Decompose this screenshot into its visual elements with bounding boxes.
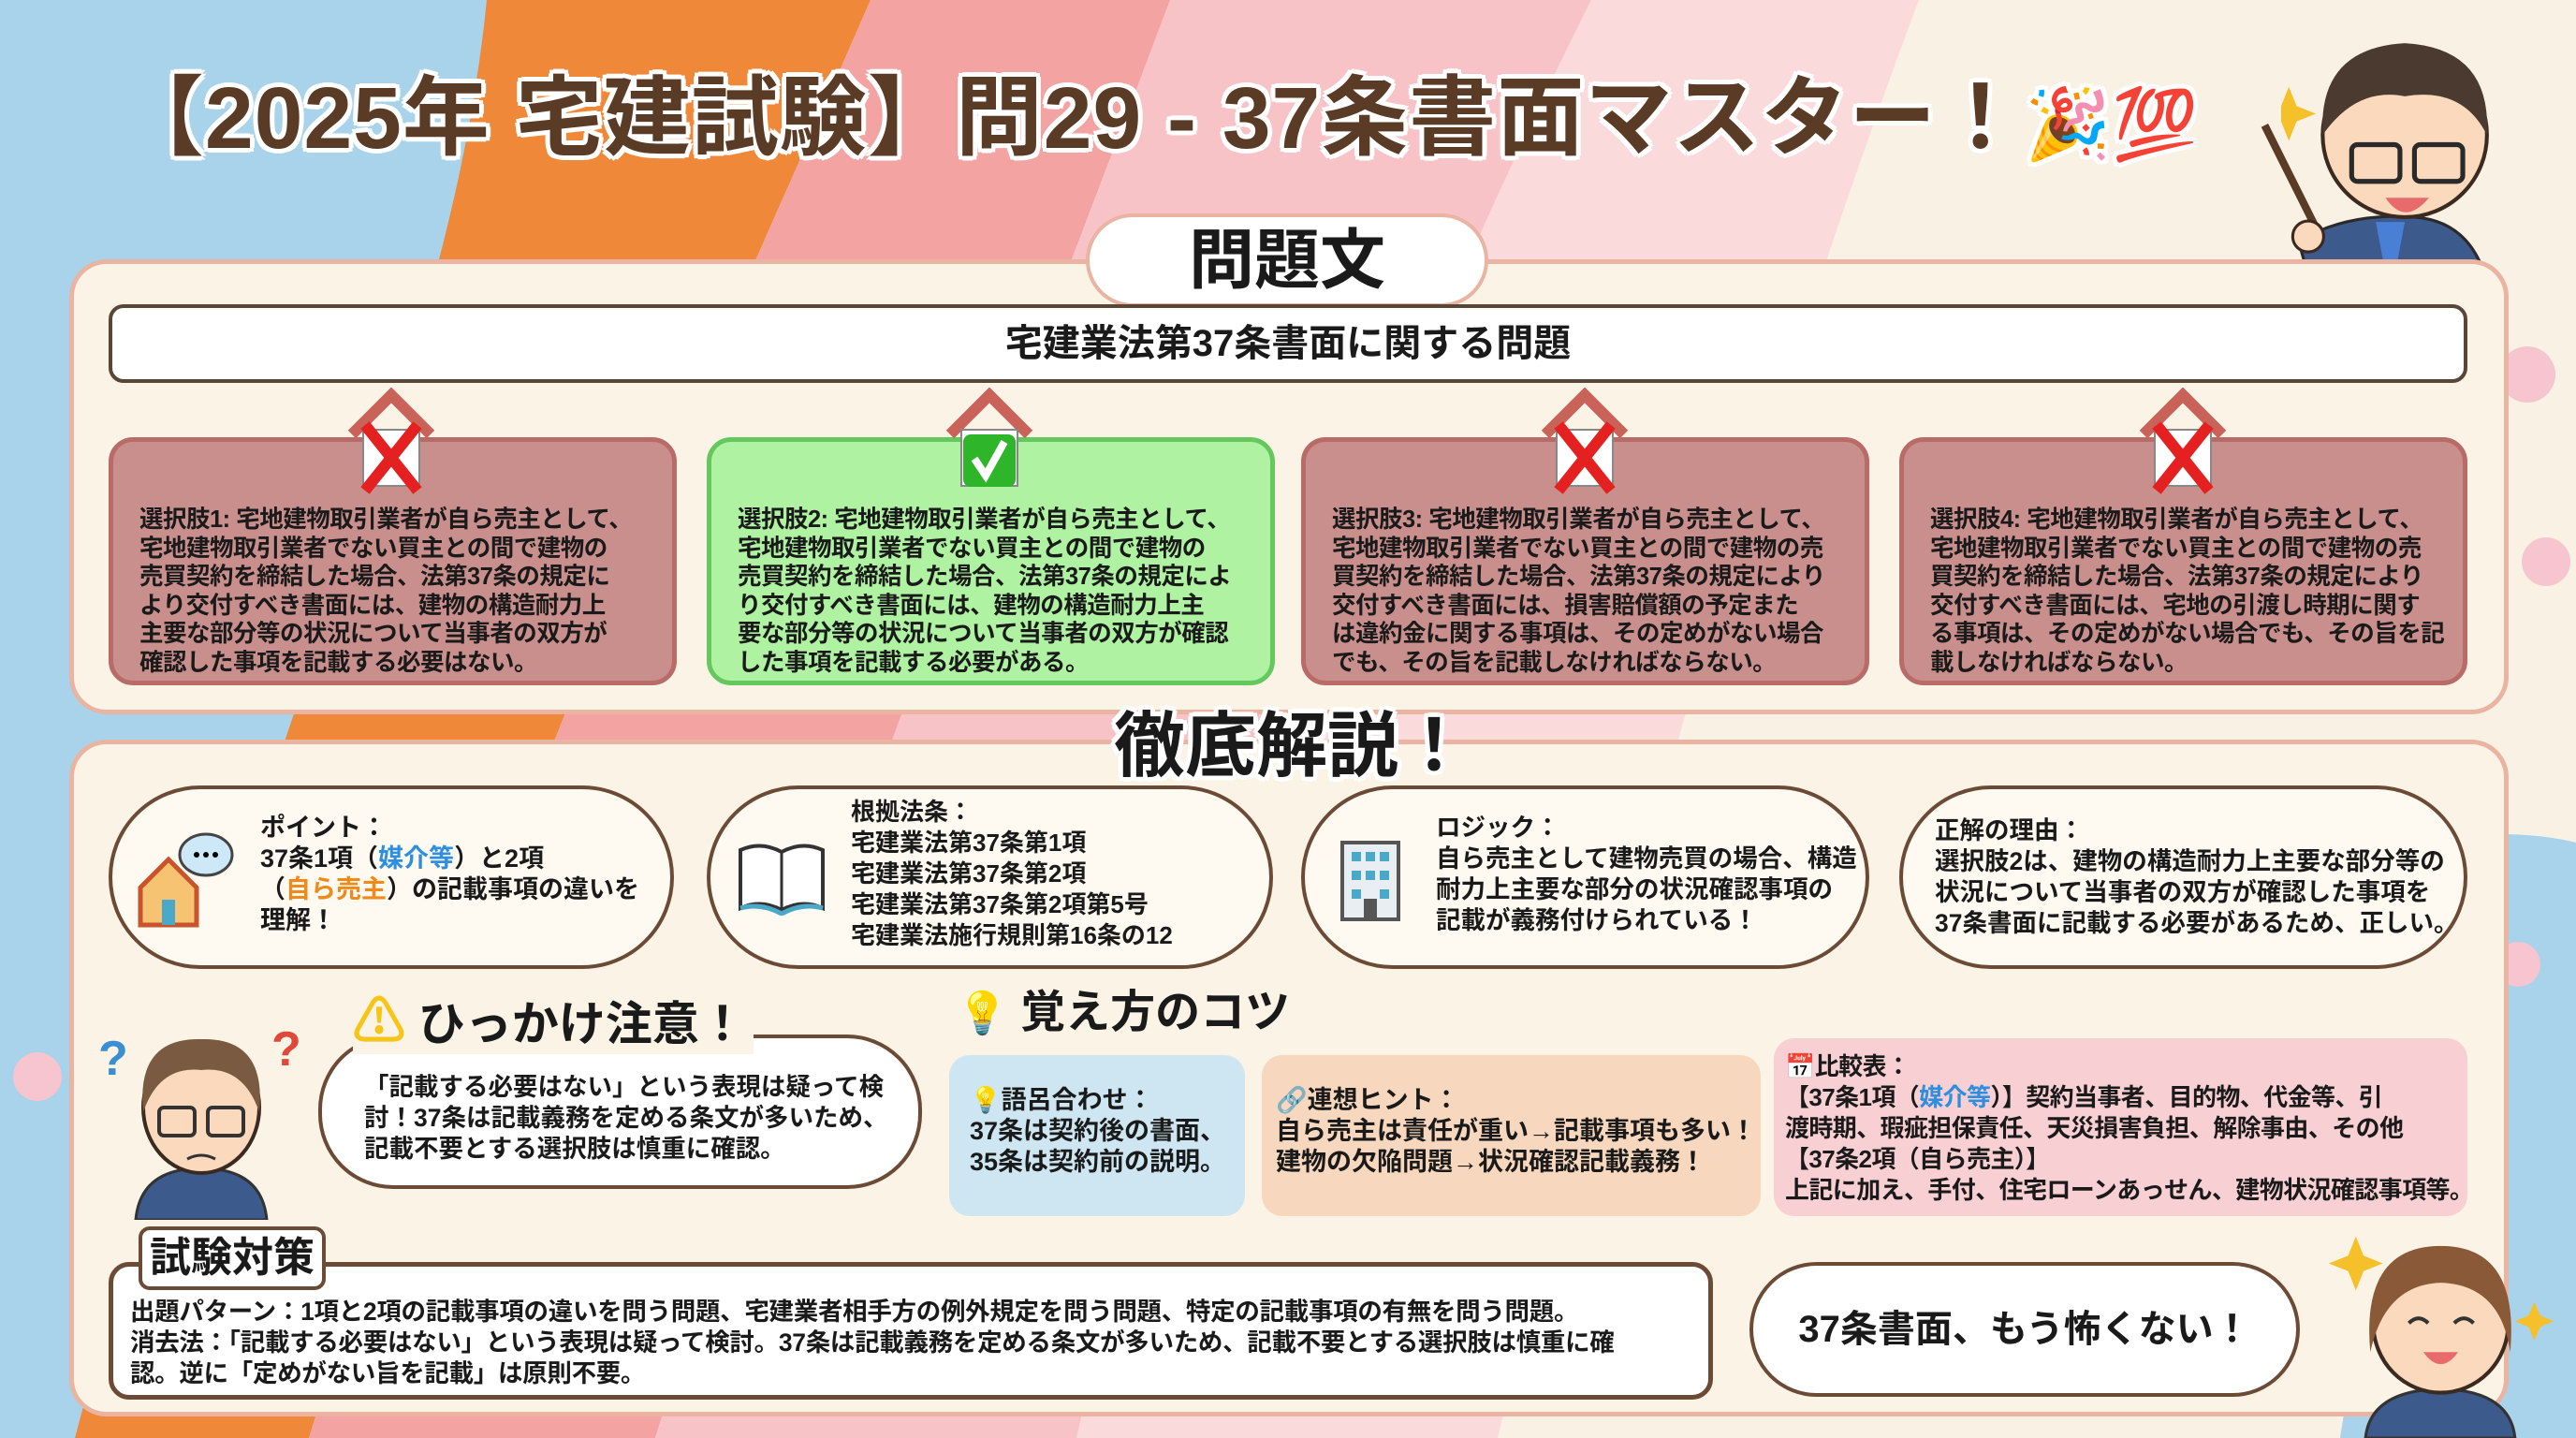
callout: ひっかけ注意: 「記載する必要はない」という表現は疑って検	[364, 1073, 884, 1101]
character: teacher	[2261, 43, 2489, 260]
box: 語呂合わせ	[949, 1055, 1245, 1216]
heading: 徹底解説: 徹底解説！	[1114, 707, 1470, 786]
pill: ロジック: 耐力上主要な部分の状況確認事項の	[1436, 875, 1833, 903]
box: 比較表: 📅比較表：	[1785, 1052, 1910, 1080]
heading: ひっかけ注意: ⚠ ひっかけ注意！	[353, 992, 746, 1051]
card: choice 2	[707, 437, 1275, 685]
callout: 37条書面、もう怖くない: 37条書面、もう怖くない！	[1798, 1309, 2251, 1350]
card: choice 1: 売買契約を締結した場合、法第37条の規定に	[139, 564, 609, 590]
heading: 問題文	[1086, 213, 1488, 307]
box: 連想ヒント: 自ら売主は責任が重い→記載事項も多い！	[1276, 1117, 1756, 1145]
subtitle bar	[109, 304, 2467, 383]
card: choice 1: 宅地建物取引業者でない買主との間で建物の	[139, 536, 607, 562]
character: confused man: ?	[271, 1022, 301, 1077]
card: choice 3: 宅地建物取引業者でない買主との間で建物の売	[1332, 536, 1823, 562]
card: choice 4: 宅地建物取引業者でない買主との間で建物の売	[1930, 536, 2422, 562]
card: choice 1: 確認した事項を記載する必要はない。	[139, 650, 537, 676]
card: choice 4: 選択肢4: 宅地建物取引業者が自ら売主として、	[1930, 506, 2422, 533]
callout: ひっかけ注意: 記載不要とする選択肢は慎重に確認。	[364, 1135, 785, 1163]
pill: ロジック: ロジック：	[1436, 814, 1559, 842]
box: 連想ヒント: 🔗連想ヒント：	[1276, 1086, 1459, 1114]
callout: ひっかけ注意	[318, 1034, 922, 1189]
pill: ポイント: （自ら売主）の記載事項の違いを	[260, 875, 639, 903]
card: choice 3: 交付すべき書面には、損害賠償額の予定また	[1332, 592, 1798, 618]
card: choice 4: 載しなければならない。	[1930, 650, 2188, 676]
card: choice 2: り交付すべき書面には、建物の構造耐力上主	[738, 592, 1204, 618]
card: choice 1: より交付すべき書面には、建物の構造耐力上	[139, 592, 606, 618]
card: choice 3: は違約金に関する事項は、その定めがない場合	[1332, 621, 1823, 647]
icon: house x 1	[348, 388, 434, 494]
panel: 徹底解説	[69, 740, 2509, 1416]
card: choice 2: 要な部分等の状況について当事者の双方が確認	[738, 621, 1228, 647]
pill: 正解の理由: 37条書面に記載する必要があるため、正しい。	[1935, 909, 2458, 937]
pill: 正解の理由: 状況について当事者の双方が確認した事項を	[1935, 878, 2430, 906]
box: 試験対策: 出題パターン：1項と2項の記載事項の違いを問う問題、宅建業者相手方の例外規定を問う問題、特定の記載事項の有無を問う問題。	[130, 1298, 1578, 1326]
callout: ひっかけ注意: 討！37条は記載義務を定める条文が多いため、	[364, 1104, 887, 1132]
card: choice 3	[1301, 437, 1869, 685]
card: choice 1: 主要な部分等の状況について当事者の双方が	[139, 621, 607, 647]
icon: building	[1340, 841, 1400, 921]
pill: 根拠法条	[707, 785, 1273, 969]
card: choice 4: る事項は、その定めがない場合でも、その旨を記	[1930, 621, 2444, 647]
box: 語呂合わせ: 37条は契約後の書面、	[970, 1117, 1225, 1145]
heading: 試験対策: 試験対策	[150, 1235, 315, 1281]
heading: 覚え方のコツ: 💡 覚え方のコツ	[957, 988, 1290, 1037]
card: choice 3: でも、その旨を記載しなければならない。	[1332, 650, 1776, 676]
pill: 正解の理由	[1899, 785, 2467, 969]
icon: house with speech	[139, 833, 234, 927]
subtitle bar: 宅建業法第37条書面に関する問題	[1005, 323, 1571, 364]
card: choice 1	[109, 437, 677, 685]
card: choice 4: 交付すべき書面には、宅地の引渡し時期に関す	[1930, 592, 2420, 618]
pill: ポイント	[109, 785, 674, 969]
box: 比較表	[1774, 1038, 2467, 1216]
card: choice 2: 選択肢2: 宅地建物取引業者が自ら売主として、	[738, 506, 1230, 533]
card: choice 4: 買契約を締結した場合、法第37条の規定により	[1930, 564, 2423, 590]
pill: ポイント: 37条1項（媒介等）と2項	[260, 844, 544, 873]
title: 【2025年 宅建試験】問29 - 37条書面マスター！🎉💯	[117, 69, 2200, 167]
box: 試験対策: 認。逆に「定めがない旨を記載」は原則不要。	[130, 1359, 645, 1387]
icon: book	[739, 844, 825, 916]
pill: 根拠法条: 宅建業法施行規則第16条の12	[851, 921, 1173, 949]
character: happy woman	[2329, 1236, 2554, 1438]
pill: ロジック: 自ら売主として建物売買の場合、構造	[1436, 844, 1857, 873]
box: 連想ヒント: 建物の欠陥問題→状況確認記載義務！	[1276, 1148, 1705, 1176]
card: choice 4	[1899, 437, 2467, 685]
icon: house x 4	[2140, 388, 2226, 494]
pill: 根拠法条: 宅建業法第37条第1項	[851, 829, 1086, 857]
box: 試験対策: 消去法：「記載する必要はない」という表現は疑って検討。37条は記載義務を定める条文が多いため、記載不要とする選択肢は慎重に確	[130, 1328, 1615, 1357]
icon: house check 2	[945, 388, 1033, 487]
pill: 根拠法条: 根拠法条：	[851, 798, 973, 826]
box: 試験対策	[109, 1262, 1713, 1400]
panel: 問題文	[69, 259, 2509, 714]
box: 比較表: 渡時期、瑕疵担保責任、天災損害負担、解除事由、その他	[1785, 1114, 2403, 1142]
icon: house x 3	[1541, 388, 1629, 494]
callout: 37条書面、もう怖くない	[1749, 1262, 2300, 1397]
box: 連想ヒント	[1262, 1055, 1761, 1216]
pill: 根拠法条: 宅建業法第37条第2項第5号	[851, 890, 1149, 918]
heading: 試験対策	[139, 1226, 326, 1290]
card: choice 1: 選択肢1: 宅地建物取引業者が自ら売主として、	[139, 506, 632, 533]
pill: ポイント: 理解！	[260, 906, 336, 934]
card: choice 3: 選択肢3: 宅地建物取引業者が自ら売主として、	[1332, 506, 1824, 533]
box: 比較表: 【37条2項（自ら売主）】	[1785, 1145, 2050, 1173]
card: choice 2: 宅地建物取引業者でない買主との間で建物の	[738, 536, 1206, 562]
card: choice 2: 売買契約を締結した場合、法第37条の規定によ	[738, 564, 1231, 590]
pill: ロジック	[1301, 785, 1869, 969]
pill: 根拠法条: 宅建業法第37条第2項	[851, 859, 1086, 888]
pill: ポイント: ポイント：	[260, 814, 387, 842]
character: confused man: ?	[98, 1032, 128, 1086]
pill: 正解の理由: 選択肢2は、建物の構造耐力上主要な部分等の	[1935, 847, 2445, 875]
box: 比較表: 上記に加え、手付、住宅ローンあっせん、建物状況確認事項等。	[1785, 1176, 2473, 1204]
box: 語呂合わせ: 35条は契約前の説明。	[970, 1148, 1225, 1176]
box: 比較表: 【37条1項（媒介等）】契約当事者、目的物、代金等、引	[1785, 1083, 2382, 1111]
box: 語呂合わせ: 💡語呂合わせ：	[970, 1086, 1153, 1114]
character: confused man	[98, 1022, 301, 1220]
card: choice 3: 買契約を締結した場合、法第37条の規定により	[1332, 564, 1825, 590]
card: choice 2: した事項を記載する必要がある。	[738, 650, 1089, 676]
pill: 正解の理由: 正解の理由：	[1935, 816, 2084, 844]
pill: ロジック: 記載が義務付けられている！	[1436, 906, 1758, 934]
heading: 問題文: 問題文	[1189, 224, 1385, 297]
